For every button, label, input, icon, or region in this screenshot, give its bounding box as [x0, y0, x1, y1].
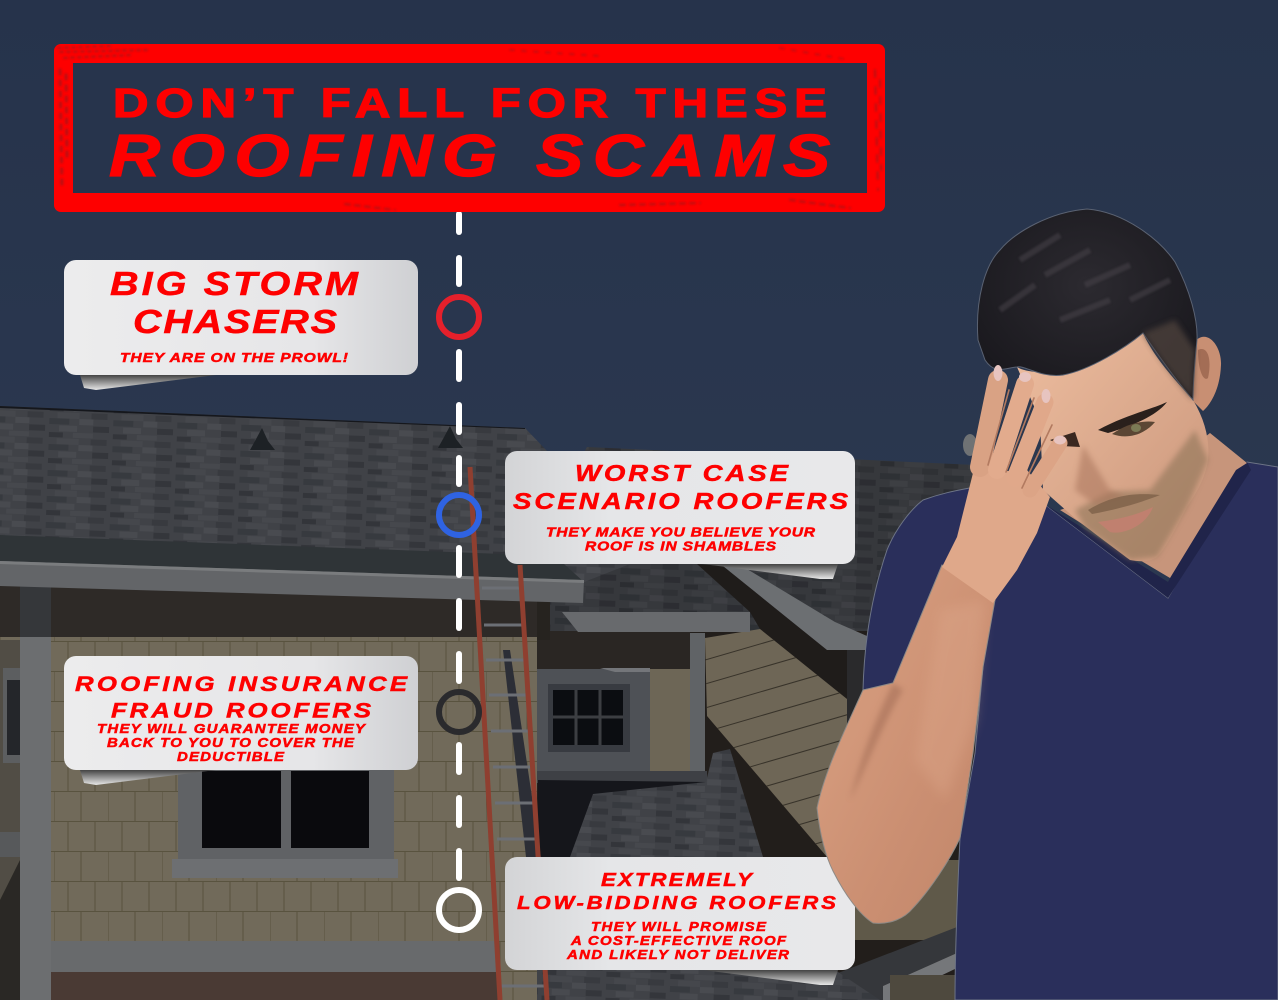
callout heading: SCENARIO ROOFERS [513, 489, 848, 514]
callout heading: CHASERS [133, 303, 337, 340]
callout heading: BIG STORM [110, 265, 359, 302]
illustration: stressed man holding his head [817, 209, 1278, 1000]
callout subtext: A COST-EFFECTIVE ROOF [570, 934, 787, 948]
callout subtext: AND LIKELY NOT DELIVER [566, 948, 789, 962]
callout heading [513, 461, 848, 514]
callout: roofing insurance fraud roofers [64, 656, 418, 785]
callout heading: WORST CASE [575, 461, 789, 486]
hair [977, 209, 1197, 400]
title line one: DON’T FALL FOR THESE [113, 80, 827, 126]
face [1017, 333, 1208, 561]
forearm and elbow [817, 565, 995, 923]
timeline marker: white [439, 890, 479, 930]
hand palm [942, 470, 1050, 603]
eyebrow [1098, 402, 1167, 433]
fingers [980, 380, 1060, 490]
callout subtext: ROOF IS IN SHAMBLES [585, 540, 776, 554]
callout heading: EXTREMELY [601, 871, 755, 891]
nose shadow [1075, 445, 1125, 505]
callout: extremely low-bidding roofers [505, 857, 855, 985]
callout heading: FRAUD ROOFERS [111, 699, 371, 723]
callout: big storm chasers [64, 260, 418, 390]
timeline marker: dark [439, 692, 479, 732]
callout heading [110, 265, 359, 340]
callout subtext: THEY WILL PROMISE [591, 920, 767, 934]
mouth [1098, 507, 1153, 533]
title sign [54, 44, 885, 212]
callout: worst case scenario roofers [505, 451, 855, 579]
callout subtext [97, 722, 367, 764]
t-shirt [863, 462, 1278, 1000]
timeline marker: blue [439, 495, 479, 535]
callout subtext: THEY WILL GUARANTEE MONEY [97, 722, 367, 736]
fingernails [994, 365, 1066, 444]
other eye in shadow of the hand [1050, 432, 1080, 447]
stubble [1075, 430, 1208, 560]
callout subtext: THEY ARE ON THE PROWL! [120, 351, 348, 366]
callout heading [75, 673, 408, 723]
ear [1192, 337, 1221, 411]
timeline marker: red [439, 297, 479, 337]
eye [1112, 422, 1155, 436]
dashed timeline line [456, 214, 462, 878]
callout subtext: BACK TO YOU TO COVER THE [107, 736, 355, 750]
callout heading: LOW-BIDDING ROOFERS [517, 894, 836, 914]
callout subtext [546, 526, 816, 554]
callout heading [517, 871, 836, 914]
callout subtext [566, 920, 789, 962]
neck [1060, 433, 1247, 578]
title line two: ROOFING SCAMS [109, 123, 830, 189]
callout subtext: DEDUCTIBLE [177, 750, 285, 764]
callout subtext: THEY MAKE YOU BELIEVE YOUR [546, 526, 816, 540]
grunge wear on the sign border [58, 46, 881, 210]
ladder leaning against the house [470, 467, 547, 1000]
callout heading: ROOFING INSURANCE [75, 673, 408, 696]
background: house with roof and walls [0, 406, 977, 1000]
